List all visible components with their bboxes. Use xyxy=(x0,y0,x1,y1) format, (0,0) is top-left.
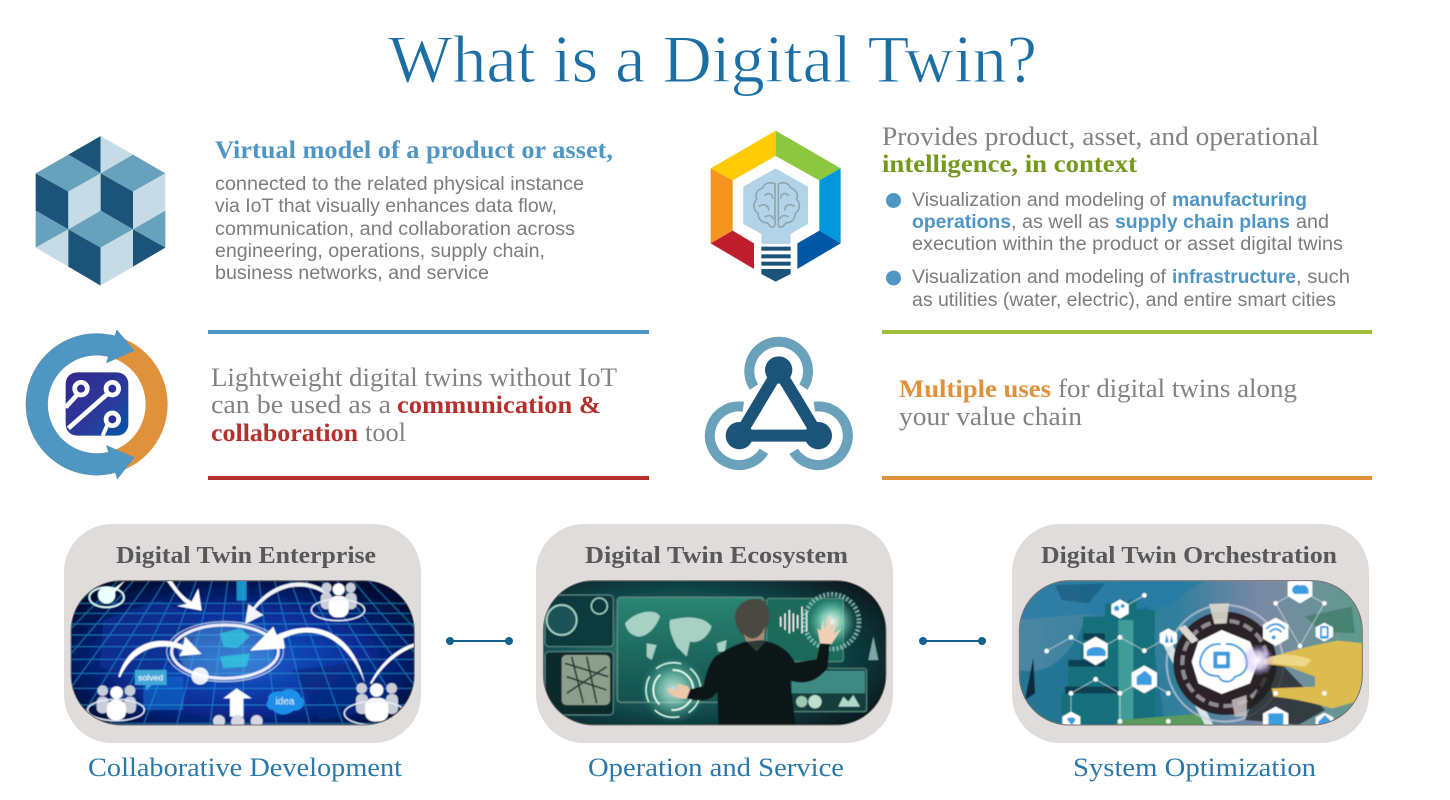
text block: multiple uses: your value chain xyxy=(899,402,1082,431)
caption: operation and service: Operation and Service xyxy=(588,753,844,782)
text block: virtual model xyxy=(215,137,613,284)
text block: operational intelligence: execution within the product or asset digital twins xyxy=(912,234,1343,255)
image: smart factory with brain chip icons xyxy=(1019,575,1362,735)
text block: operational intelligence: Visualization and modeling of xyxy=(912,267,1167,288)
text block: operational intelligence: operations xyxy=(912,212,1011,233)
connector: ecosystem to orchestration xyxy=(920,638,986,644)
image: global collaboration network: solved xyxy=(138,673,163,683)
heading: digital twin ecosystem: Digital Twin Ecosystem xyxy=(585,543,848,569)
text block: operational intelligence: as utilities (water, electric), and entire smart cities xyxy=(912,290,1336,311)
text block: virtual model: engineering, operations, supply chain, xyxy=(215,241,545,262)
text block: operational intelligence: infrastructure xyxy=(1172,267,1296,288)
text block: virtual model: connected to the related physical instance xyxy=(215,174,584,195)
image: man operating holographic interface xyxy=(543,581,886,725)
icon: lightbulb with brain in hexagon xyxy=(711,131,841,282)
title: What is a Digital Twin? xyxy=(388,21,1037,97)
text block: multiple uses: for digital twins along xyxy=(1058,374,1297,403)
text block: operational intelligence: , as well as xyxy=(1011,212,1109,233)
panel: digital twin enterprise xyxy=(64,524,421,743)
text block: multiple uses: Multiple uses xyxy=(899,376,1051,403)
text block: operational intelligence: intelligence, in context xyxy=(882,151,1138,178)
image: global collaboration network xyxy=(70,580,415,726)
text block: lightweight digital twins: communication & xyxy=(397,392,601,419)
text block: operational intelligence xyxy=(882,122,1350,311)
text block: operational intelligence: Provides product, asset, and operational xyxy=(882,122,1319,151)
text block: operational intelligence: manufacturing xyxy=(1172,190,1307,211)
text block: lightweight digital twins xyxy=(211,363,617,447)
text block: operational intelligence: supply chain plans xyxy=(1115,212,1290,233)
text block: multiple uses xyxy=(899,374,1297,431)
text block: operational intelligence: and xyxy=(1296,212,1329,233)
text block: operational intelligence: Visualization and modeling of xyxy=(912,190,1167,211)
caption: collaborative development: Collaborative Development xyxy=(88,753,403,782)
caption: system optimization: System Optimization xyxy=(1073,753,1316,782)
icon: network triangle xyxy=(710,342,848,465)
text block: virtual model: business networks, and service xyxy=(215,263,489,284)
text block: lightweight digital twins: Lightweight digital twins without IoT xyxy=(211,363,617,392)
heading: digital twin enterprise: Digital Twin Enterprise xyxy=(116,543,376,569)
icon: isometric cube hexagon xyxy=(36,136,165,286)
text block: lightweight digital twins: can be used as a xyxy=(211,390,391,419)
text block: virtual model: communication, and collaboration across xyxy=(215,219,575,240)
text block: lightweight digital twins: tool xyxy=(365,418,406,447)
panel: digital twin orchestration xyxy=(1012,524,1369,743)
text block: lightweight digital twins: collaboration xyxy=(211,420,358,447)
text block: operational intelligence: , such xyxy=(1296,267,1350,288)
icon: cycle arrows with circuit chip xyxy=(37,329,157,479)
heading: digital twin orchestration: Digital Twin Orchestration xyxy=(1041,543,1337,569)
connector: enterprise to ecosystem xyxy=(446,638,512,644)
image: global collaboration network: idea xyxy=(276,696,295,707)
text block: virtual model: Virtual model of a product or asset, xyxy=(215,137,613,164)
text block: virtual model: via IoT that visually enhances data flow, xyxy=(215,196,557,217)
panel: digital twin ecosystem xyxy=(536,524,893,743)
